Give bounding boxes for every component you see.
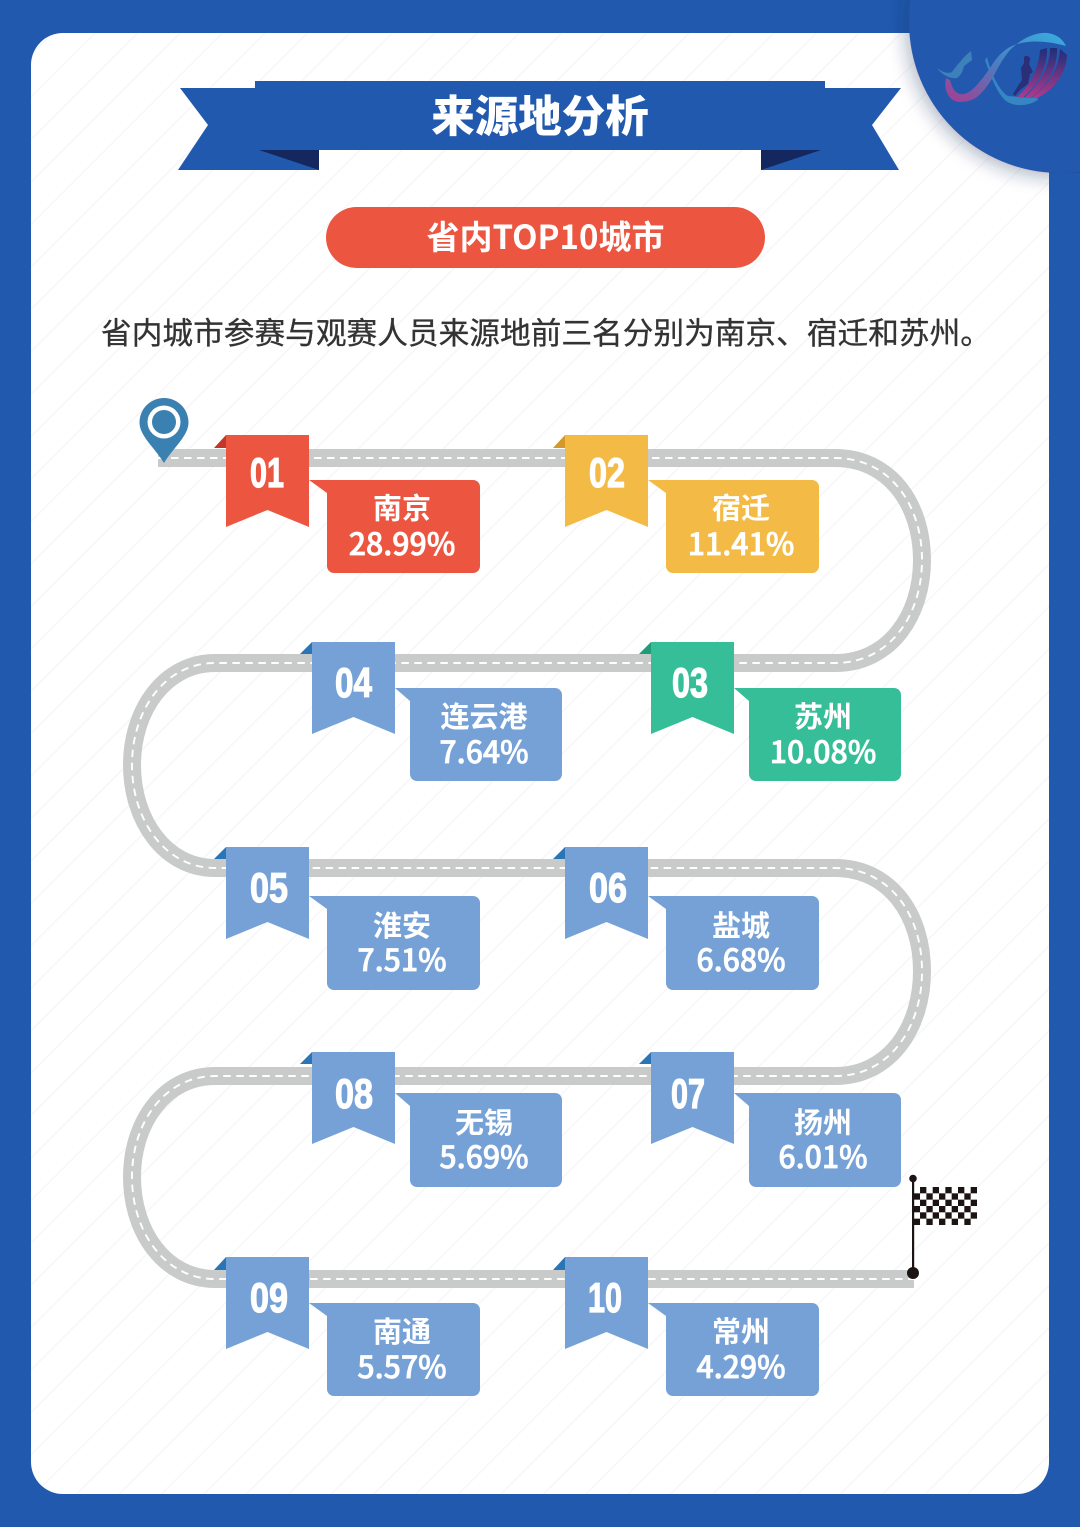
item 06 盐城 — [553, 847, 819, 990]
item 01 南京: 01 — [250, 449, 284, 496]
item 07 扬州: 07 — [671, 1070, 705, 1117]
subtitle pill — [326, 207, 765, 268]
item 03 苏州 — [639, 642, 901, 781]
item 08 无锡: 无锡 — [455, 1107, 513, 1140]
item 08 无锡 — [300, 1052, 562, 1187]
item 05 淮安: 淮安 — [373, 910, 431, 943]
item 05 淮安: 05 — [250, 864, 288, 911]
icon: location pin — [140, 398, 188, 463]
item 05 淮安 — [214, 847, 480, 990]
item 05 淮安: 7.51% — [357, 936, 447, 980]
icon: checkered finish flag — [907, 1175, 977, 1279]
item 09 南通: 5.57% — [357, 1343, 447, 1387]
item 09 南通: 南通 — [373, 1316, 431, 1349]
item 07 扬州: 6.01% — [778, 1133, 868, 1177]
item 06 盐城: 6.68% — [696, 936, 786, 980]
road — [132, 458, 922, 1279]
item 10 常州: 10 — [588, 1274, 622, 1321]
subtitle pill: 省内TOP10城市 — [427, 211, 664, 259]
item 06 盐城: 06 — [589, 864, 627, 911]
item 09 南通: 09 — [250, 1274, 288, 1321]
item 09 南通 — [214, 1257, 480, 1396]
heading: 来源地分析 — [431, 94, 649, 142]
title ribbon — [178, 81, 901, 170]
item 04 连云港: 04 — [335, 659, 373, 706]
item 04 连云港: 连云港 — [440, 701, 528, 734]
item 02 宿迁: 11.41% — [688, 520, 794, 564]
corner logo badge — [909, 0, 1080, 193]
item 04 连云港 — [300, 642, 562, 781]
item 02 宿迁: 宿迁 — [712, 492, 770, 526]
item 10 常州: 常州 — [712, 1316, 770, 1349]
item 03 苏州: 10.08% — [770, 728, 876, 772]
item 03 苏州: 苏州 — [794, 701, 852, 734]
item 07 扬州 — [639, 1052, 901, 1187]
item 10 常州 — [553, 1257, 819, 1396]
item 01 南京: 南京 — [373, 492, 431, 526]
item 06 盐城: 盐城 — [712, 910, 770, 943]
item 02 宿迁 — [553, 435, 819, 573]
description text: 省内城市参赛与观赛人员来源地前三名分别为南京、宿迁和苏州。 — [101, 316, 991, 351]
item 08 无锡: 5.69% — [439, 1133, 529, 1177]
item 02 宿迁: 02 — [589, 449, 625, 496]
item 01 南京: 28.99% — [349, 520, 455, 564]
item 03 苏州: 03 — [672, 659, 708, 706]
icon: dragon and runner logo — [937, 33, 1067, 105]
item 04 连云港: 7.64% — [439, 728, 529, 772]
item 01 南京 — [214, 435, 480, 573]
item 10 常州: 4.29% — [696, 1343, 786, 1387]
item 08 无锡: 08 — [335, 1070, 373, 1117]
item 07 扬州: 扬州 — [794, 1107, 852, 1140]
